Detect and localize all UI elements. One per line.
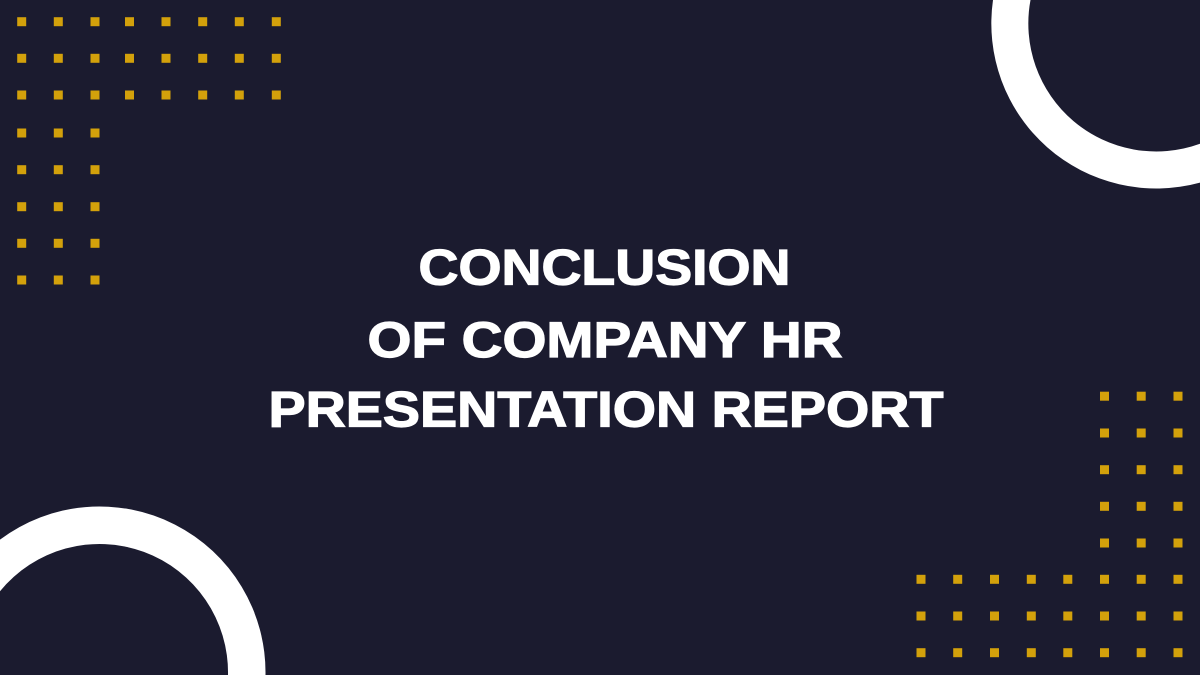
dot grid: top left [17,17,281,284]
ring: bottom left [0,506,266,675]
ring: top right [991,0,1200,188]
title [268,240,944,437]
title: PRESENTATION REPORT [268,381,944,437]
title: OF COMPANY HR [368,312,842,368]
dot grid: bottom right [916,392,1182,657]
title: CONCLUSION [418,240,790,296]
